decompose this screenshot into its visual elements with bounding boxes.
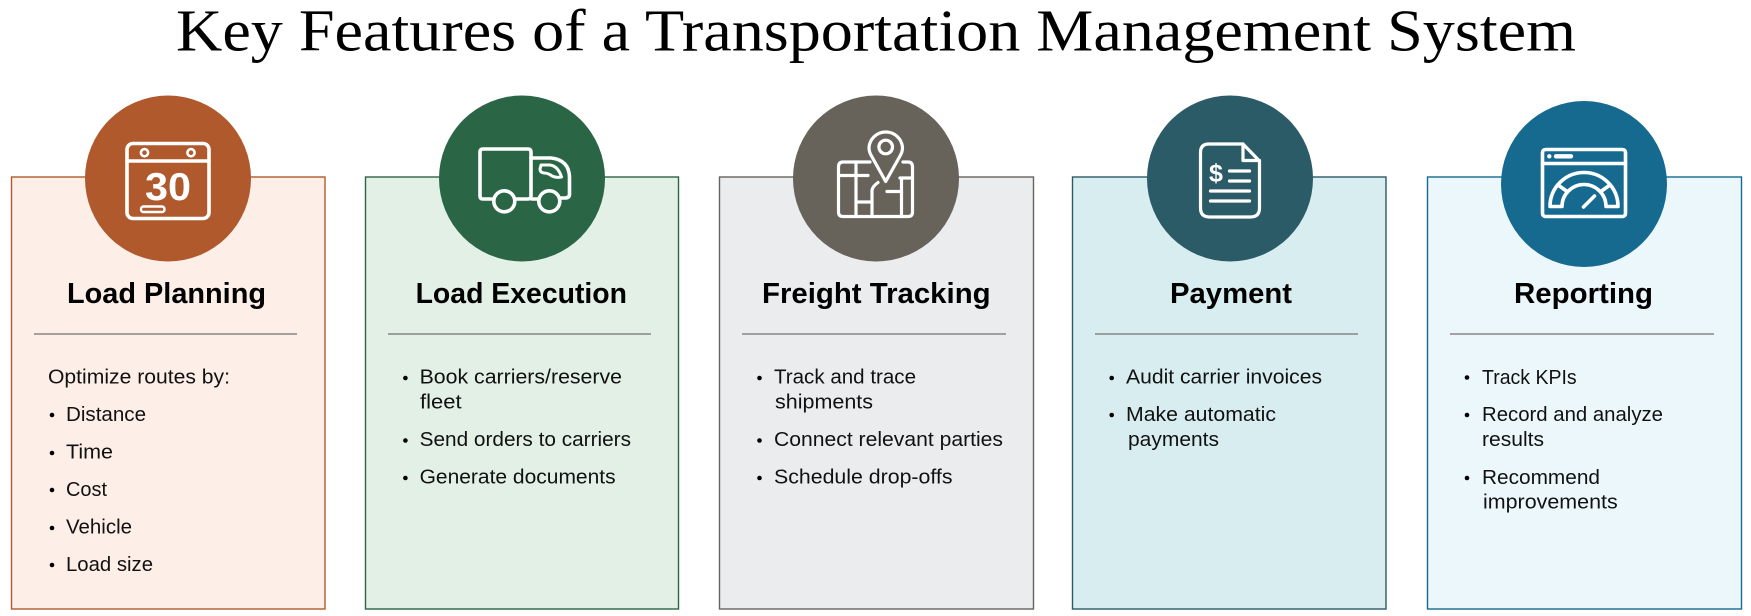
feature list: Audit carrier invoices: [1126, 366, 1322, 388]
heading: Payment: [1170, 278, 1293, 310]
feature list: Optimize routes by:: [48, 366, 230, 388]
panel background: [720, 177, 1034, 609]
feature list: Track KPIs: [1482, 367, 1577, 389]
feature list: fleet: [420, 392, 462, 414]
panel background: [12, 177, 325, 609]
heading: Reporting: [1514, 278, 1653, 310]
feature list: Record and analyze: [1482, 404, 1663, 426]
feature list: [757, 366, 1003, 489]
feature list: Vehicle: [66, 516, 132, 538]
feature list: [48, 366, 230, 576]
feature list: Track and trace: [774, 366, 916, 388]
panel: freight tracking: [720, 96, 1034, 609]
feature list: improvements: [1483, 492, 1618, 514]
feature list: Make automatic: [1126, 404, 1276, 426]
feature list: Cost: [66, 479, 107, 501]
icon: calendar: [85, 96, 251, 262]
feature list: results: [1482, 429, 1544, 451]
icon: invoice: [1147, 96, 1313, 262]
heading: Load Execution: [416, 278, 627, 310]
feature list: Recommend: [1482, 467, 1600, 489]
feature list: Send orders to carriers: [420, 429, 631, 451]
feature list: Time: [66, 442, 113, 464]
feature list: payments: [1128, 429, 1219, 451]
panel background: [1072, 177, 1386, 609]
icon: calendar: 30: [145, 166, 191, 209]
feature list: Connect relevant parties: [774, 429, 1003, 451]
icon: truck: [439, 96, 605, 262]
icon: invoice: $: [1209, 160, 1223, 188]
heading: Load Planning: [67, 278, 266, 310]
feature list: Schedule drop-offs: [774, 467, 952, 489]
panel background: [1428, 177, 1742, 609]
heading: Freight Tracking: [762, 278, 991, 310]
panel background: [366, 177, 678, 609]
feature list: [1109, 366, 1322, 451]
panel: payment: [1072, 96, 1386, 609]
feature list: [1465, 367, 1663, 514]
feature list: Book carriers/reserve: [420, 366, 622, 388]
feature list: Distance: [66, 404, 146, 426]
icon: map pin: [793, 96, 959, 262]
feature list: Generate documents: [420, 467, 616, 489]
panel: load planning: [12, 96, 325, 609]
panel: reporting: [1428, 101, 1742, 609]
panel: load execution: [366, 96, 678, 609]
icon: dashboard gauge: [1501, 101, 1667, 267]
feature list: Load size: [66, 554, 153, 576]
feature list: shipments: [775, 392, 873, 414]
feature list: [403, 366, 631, 489]
